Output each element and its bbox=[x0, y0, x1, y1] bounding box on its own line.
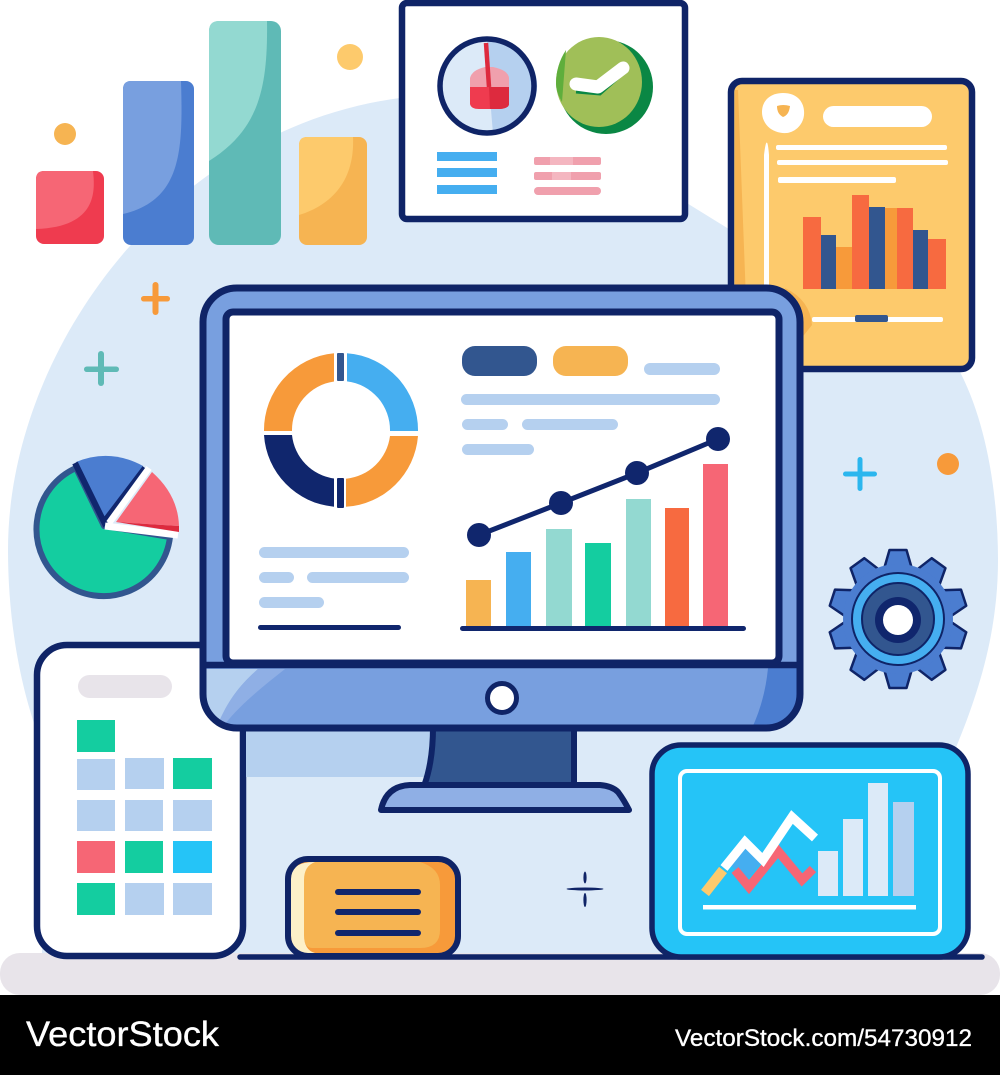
calendar card bbox=[37, 645, 243, 956]
dot: upper left bbox=[54, 123, 76, 145]
brand name: VectorStock bbox=[26, 1015, 220, 1054]
plus: blue bbox=[843, 457, 877, 491]
pink text lines bbox=[534, 157, 601, 195]
header pills bbox=[462, 346, 720, 376]
line chart bbox=[467, 427, 730, 547]
gear icon bbox=[828, 550, 968, 688]
floating bar: blue bbox=[123, 81, 194, 245]
white text lines bbox=[764, 142, 948, 285]
calendar grid bbox=[77, 720, 212, 915]
monitor stand bbox=[381, 727, 629, 810]
background blob bbox=[8, 98, 998, 955]
plus: orange bbox=[141, 282, 170, 315]
floating bar: teal bbox=[209, 21, 281, 245]
card title pill bbox=[78, 675, 172, 698]
note lines bbox=[335, 889, 421, 936]
dot: upper centre bbox=[337, 44, 363, 70]
check badge icon bbox=[556, 37, 653, 134]
avatar icon bbox=[762, 93, 804, 133]
plus: navy bbox=[566, 872, 604, 907]
report card: top centre bbox=[402, 3, 685, 219]
image url: VectorStock.com/54730912 bbox=[675, 1025, 972, 1052]
monitor bbox=[203, 288, 812, 728]
dot: right orange bbox=[937, 453, 959, 475]
tablet bars bbox=[703, 783, 916, 910]
floating bar: yellow bbox=[299, 137, 367, 245]
tablet bbox=[652, 745, 968, 957]
blue text lines bbox=[437, 152, 497, 194]
footer watermark bar bbox=[0, 995, 1000, 1075]
gauge icon bbox=[440, 39, 537, 133]
bar chart bbox=[460, 464, 746, 631]
text lines upper bbox=[461, 394, 720, 455]
floating bar: red bbox=[36, 171, 104, 244]
screen bbox=[226, 312, 779, 663]
document card: right bbox=[731, 81, 972, 369]
note card bbox=[288, 859, 458, 956]
text lines lower bbox=[258, 547, 409, 630]
shelf bbox=[0, 953, 1000, 995]
donut chart bbox=[264, 353, 418, 508]
tablet line chart bbox=[705, 817, 815, 893]
plus: teal bbox=[84, 351, 119, 386]
title pill bbox=[823, 106, 932, 127]
slider bbox=[812, 315, 943, 322]
pie chart bbox=[36, 456, 179, 596]
power button bbox=[488, 684, 516, 712]
monitor stand shadow bbox=[246, 728, 433, 777]
orange and navy bar chart bbox=[803, 195, 946, 289]
